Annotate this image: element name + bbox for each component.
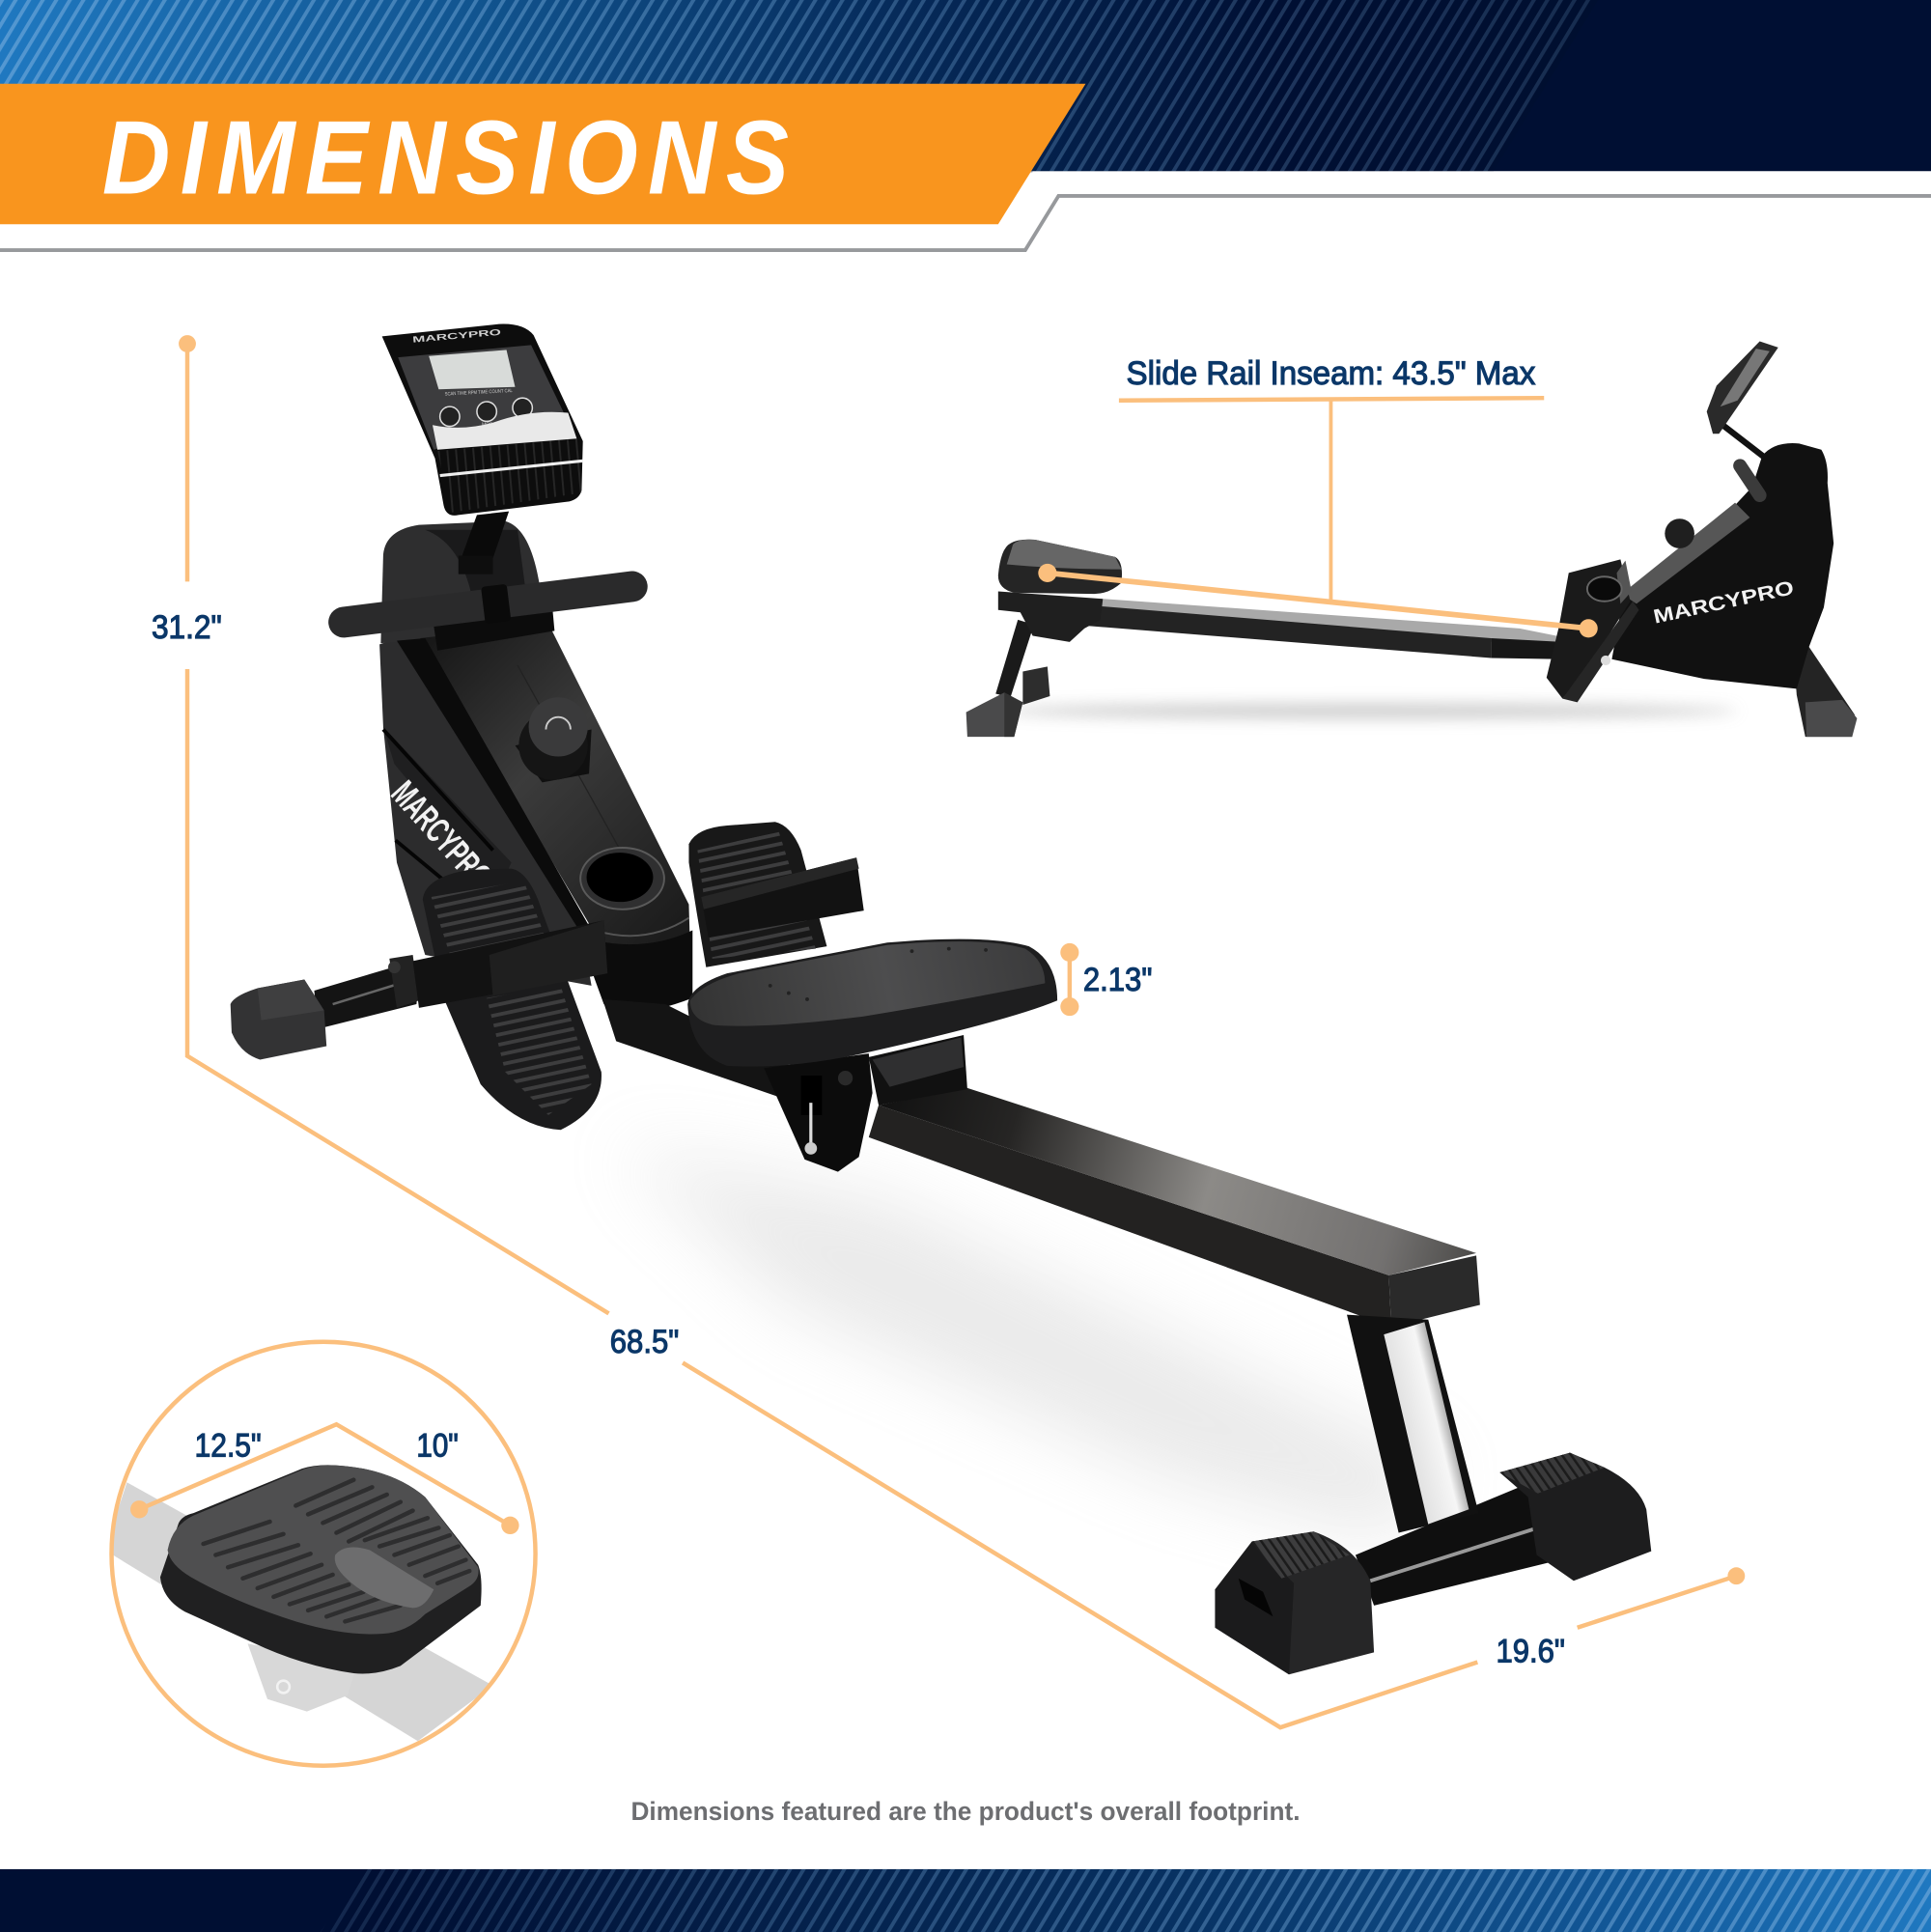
front base foot xyxy=(1215,1453,1651,1674)
side view shadow xyxy=(998,704,1738,718)
resistance knob xyxy=(516,697,592,782)
seat bracket xyxy=(764,1035,967,1172)
header rule xyxy=(0,171,1931,250)
right footplate xyxy=(688,822,864,967)
inset pedal ribs right xyxy=(295,1480,469,1583)
floor shadow xyxy=(616,1146,1441,1540)
rail xyxy=(869,1088,1480,1327)
upper housing xyxy=(380,521,548,643)
frame under seat xyxy=(602,999,801,1101)
title: DIMENSIONS xyxy=(102,99,789,215)
rear base foot xyxy=(231,955,419,1059)
console post xyxy=(462,512,509,562)
console screen xyxy=(429,350,516,389)
inset pedal xyxy=(160,1465,482,1674)
top plate xyxy=(397,624,692,1012)
body logo: MARCYPRO xyxy=(383,772,500,896)
console button labels: MODE xyxy=(482,423,497,429)
slide rail callout xyxy=(1038,355,1598,637)
console button labels: SET xyxy=(521,419,531,425)
foot pad inset xyxy=(104,1342,536,1766)
dimension label: width: 19.6" xyxy=(1496,1634,1565,1670)
dimension label: seat height: 2.13" xyxy=(1083,962,1152,998)
left footplate xyxy=(413,869,607,1130)
side view rear foot xyxy=(1793,647,1857,737)
title banner xyxy=(0,84,1085,224)
side view front foot xyxy=(966,620,1049,737)
cup holder xyxy=(580,848,664,910)
console buttons xyxy=(440,398,532,427)
side view plate xyxy=(1622,503,1749,603)
inset circle xyxy=(112,1342,536,1766)
inset pedal ribs left xyxy=(204,1522,401,1621)
inset ghost rail xyxy=(104,1482,493,1741)
main rower illustration xyxy=(231,324,1651,1674)
dimension label: length: 68.5" xyxy=(610,1324,679,1360)
side view rail xyxy=(1088,599,1581,659)
console brand: MARCYPRO xyxy=(412,327,501,345)
dimension label: height: 31.2" xyxy=(152,609,222,646)
handle bar xyxy=(344,584,632,651)
slide rail lines xyxy=(1048,398,1588,629)
front support leg xyxy=(1347,1315,1479,1533)
inset label: width: 10" xyxy=(416,1427,459,1464)
side view carriage xyxy=(998,592,1103,642)
console xyxy=(382,324,583,516)
footnote: Dimensions featured are the product's overall footprint. xyxy=(630,1797,1301,1826)
slide rail label: Slide Rail Inseam: 43.5" Max xyxy=(1127,355,1535,392)
side view footplates xyxy=(1547,559,1639,702)
seat xyxy=(687,939,1057,1067)
body housing xyxy=(379,629,592,986)
side view knob xyxy=(1665,518,1694,548)
inset pedal center pad xyxy=(335,1548,434,1608)
inset label: length: 12.5" xyxy=(195,1427,262,1464)
front base tube xyxy=(1356,1481,1580,1606)
console stats: SCAN TIME RPM TIME COUNT CAL xyxy=(445,388,513,398)
side view seat xyxy=(998,540,1122,594)
side view console xyxy=(1707,341,1778,459)
console button labels xyxy=(482,419,531,429)
top banner xyxy=(0,0,1931,173)
dimension lines: main rower xyxy=(179,335,1745,1727)
side view handle xyxy=(1740,465,1760,495)
bottom banner xyxy=(0,1869,1931,1932)
side view brand: MARCYPRO xyxy=(1652,577,1796,629)
side view body xyxy=(1611,443,1833,688)
inset measurement lines xyxy=(130,1424,519,1534)
side view rower xyxy=(966,341,1857,737)
